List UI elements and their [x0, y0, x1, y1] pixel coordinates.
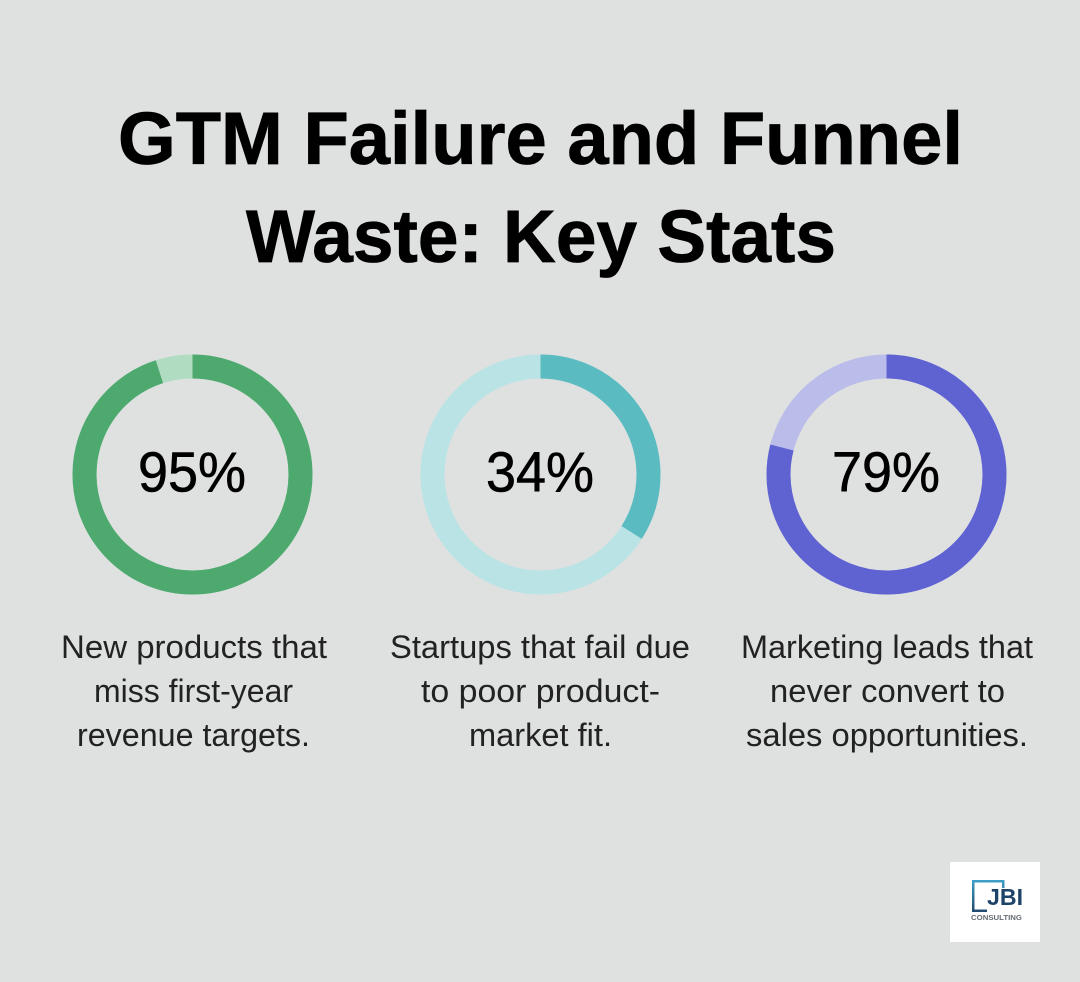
- title: GTM Failure and Funnel: [118, 97, 963, 180]
- description: new products: [61, 629, 327, 753]
- title: [118, 97, 963, 278]
- description: new products: revenue targets.: [77, 717, 310, 753]
- description: startups: Startups that fail due: [390, 629, 690, 665]
- value: 79%: 79%: [832, 440, 940, 504]
- description: marketing leads: sales opportunities.: [746, 717, 1028, 753]
- description: marketing leads: never convert to: [770, 673, 1005, 709]
- donut chart: 34%: [432, 366, 648, 582]
- description: marketing leads: [741, 629, 1033, 753]
- description: startups: market fit.: [469, 717, 612, 753]
- description: new products: miss first-year: [94, 673, 293, 709]
- donut chart: 95%: [84, 366, 300, 582]
- value: 95%: 95%: [138, 440, 246, 504]
- logo: JBI Consulting: JBI: [987, 884, 1023, 910]
- description: marketing leads: Marketing leads that: [741, 629, 1033, 665]
- description: new products: New products that: [61, 629, 327, 665]
- value: 34%: 34%: [486, 440, 594, 504]
- panel: startups stat: [390, 366, 690, 753]
- description: startups: to poor product-: [421, 673, 660, 709]
- logo: JBI Consulting: CONSULTING: [971, 915, 1023, 922]
- logo: JBI Consulting: [950, 862, 1040, 942]
- panel: marketing leads stat: [741, 366, 1033, 753]
- panel: new products stat: [61, 366, 327, 753]
- donut chart: 79%: [778, 366, 994, 582]
- description: startups: [390, 629, 690, 753]
- title: Waste: Key Stats: [246, 195, 836, 278]
